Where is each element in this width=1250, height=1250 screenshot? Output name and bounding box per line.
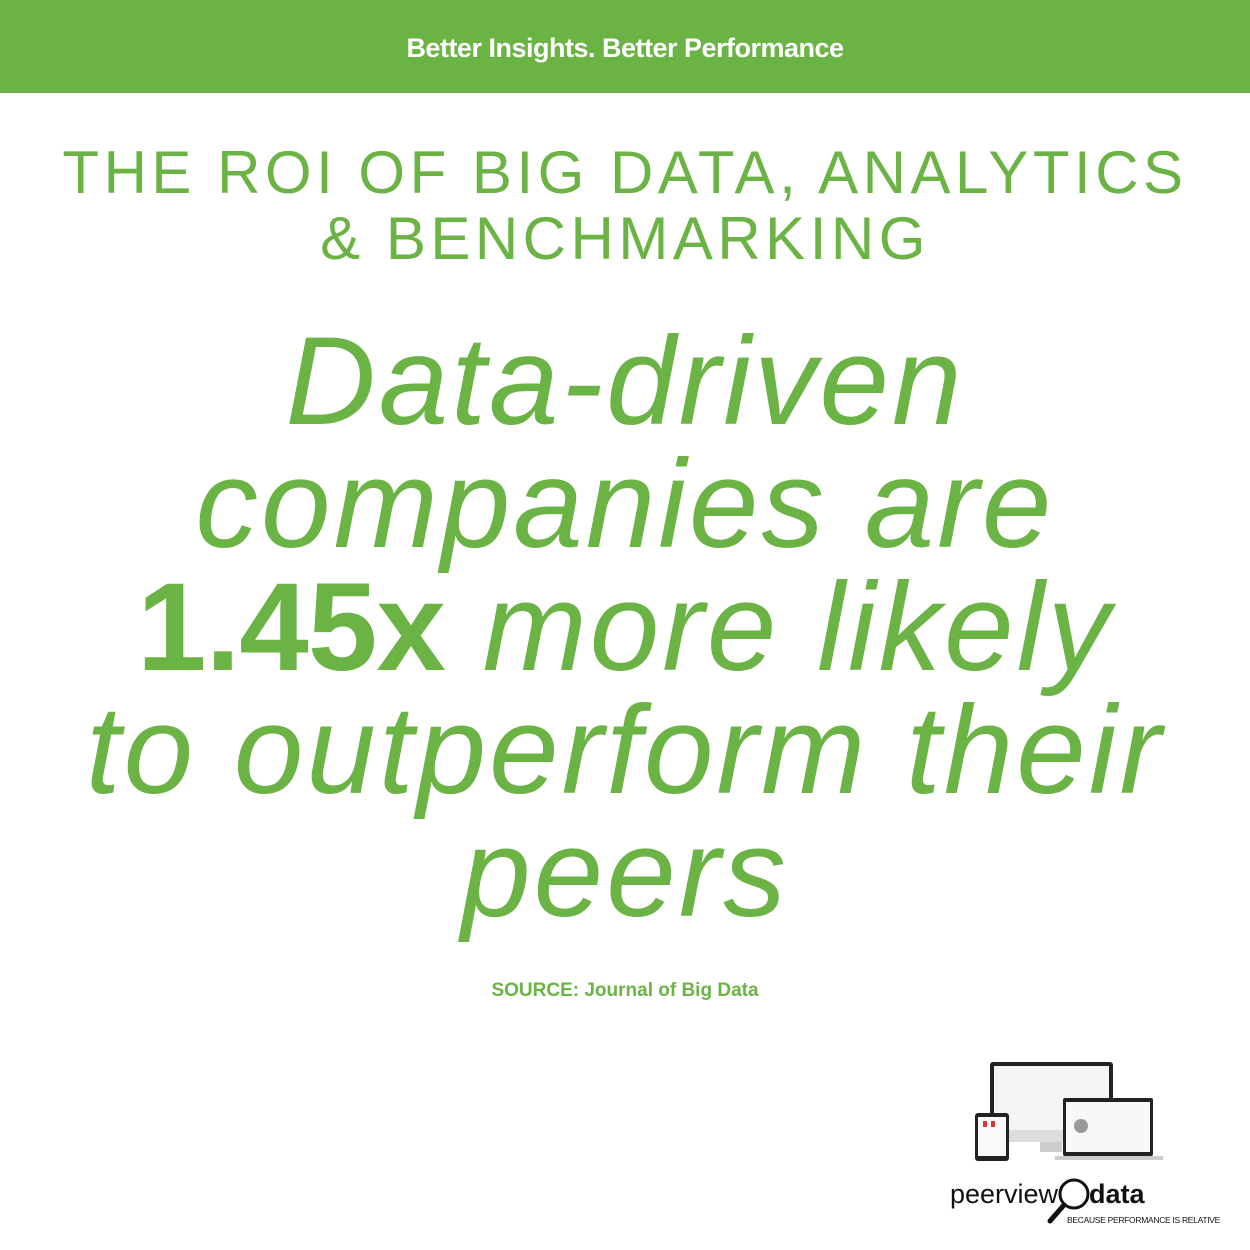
- brand text: BECAUSE PERFORMANCE IS RELATIVE: [1067, 1215, 1221, 1225]
- logo: peerview data: [950, 1062, 1221, 1225]
- headline statement: peers: [461, 804, 789, 943]
- brand text: peerview: [950, 1179, 1059, 1209]
- headline statement: companies are: [196, 435, 1054, 574]
- title: & BENCHMARKING: [320, 205, 930, 272]
- headline statement: Data-driven: [285, 312, 965, 451]
- brand text: data: [1089, 1179, 1146, 1209]
- headline statement: 1.45x more likely: [137, 558, 1113, 697]
- title: [62, 139, 1188, 272]
- icon: devices: [975, 1062, 1163, 1161]
- header bar: Better Insights. Better Performance: [406, 33, 844, 63]
- title: THE ROI OF BIG DATA, ANALYTICS: [62, 139, 1188, 206]
- source: SOURCE: Journal of Big Data: [491, 980, 759, 1001]
- brand text: [950, 1179, 1221, 1225]
- headline statement: [86, 312, 1166, 943]
- header bar: [0, 0, 1250, 93]
- headline statement: to outperform their: [86, 681, 1164, 820]
